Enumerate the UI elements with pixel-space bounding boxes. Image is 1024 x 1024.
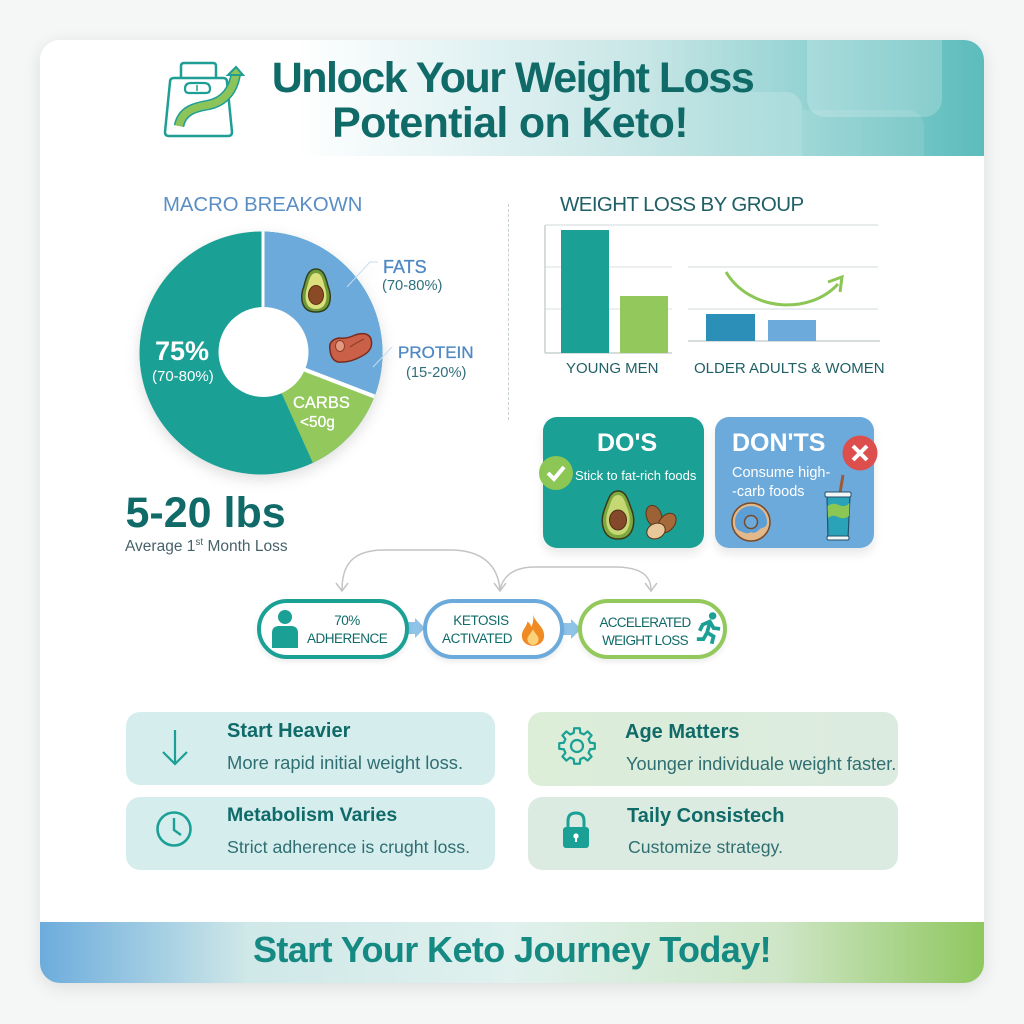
text: daily consistency: Customize strategy. <box>628 837 783 857</box>
bar chart <box>544 224 880 354</box>
step: ketosis <box>423 599 564 659</box>
panel: metabolism <box>126 797 495 870</box>
footer text: Start Your Keto Journey Today! <box>253 929 771 970</box>
text: metabolism: Strict adherence is crught loss. <box>227 837 470 857</box>
label: young men: YOUNG MEN <box>566 360 659 377</box>
icon: avocado and almonds <box>602 490 677 540</box>
icon: gear <box>558 727 596 765</box>
icon: lock <box>563 812 589 848</box>
text: age matters: Younger individuale weight faster. <box>626 754 896 774</box>
text: do's: Stick to fat-rich foods <box>575 468 696 483</box>
text: don'ts <box>732 465 830 500</box>
flow arrows <box>336 549 658 639</box>
label: protein: PROTEIN <box>398 343 474 362</box>
heading: don'ts: DON'TS <box>732 429 825 457</box>
label: protein <box>398 343 474 381</box>
icon: steak <box>330 334 372 362</box>
text: adherence <box>307 613 388 646</box>
footer band <box>40 922 984 983</box>
label: carbs: <50g <box>300 414 335 431</box>
text: ketosis: KETOSIS <box>453 613 509 628</box>
text: adherence: ADHERENCE <box>307 631 387 646</box>
text: start heavier: More rapid initial weight loss. <box>227 752 463 773</box>
label: 75 percent <box>152 336 214 385</box>
arrow: trend <box>726 272 842 305</box>
icon: cross <box>842 436 878 470</box>
icon: check <box>539 456 573 490</box>
text: weight loss: ACCELERATED <box>599 615 691 630</box>
pie chart <box>135 232 392 484</box>
label: 75 percent: 75% <box>155 336 209 366</box>
label: carbs <box>293 394 350 431</box>
title: Potential on Keto! <box>332 99 688 147</box>
icon: clock <box>156 811 192 847</box>
label: older adults: OLDER ADULTS & WOMEN <box>694 360 885 377</box>
title: Unlock Your Weight Loss <box>272 54 753 102</box>
panel: start heavier <box>126 712 495 785</box>
label: fats: FATS <box>383 257 427 277</box>
title <box>272 54 753 147</box>
text: don'ts: Consume high- <box>732 465 830 481</box>
step: weight loss <box>578 599 727 659</box>
text: adherence: 70% <box>334 613 360 628</box>
panel: do's <box>543 417 704 548</box>
stat: average loss: 5-20 lbs <box>126 489 286 537</box>
label: fats: (70-80%) <box>382 278 442 294</box>
icon: cup <box>824 474 852 540</box>
heading: age matters: Age Matters <box>625 721 739 743</box>
label: 75 percent: (70-80%) <box>152 368 214 385</box>
heading: do's: DO'S <box>597 429 657 457</box>
header band <box>40 40 984 156</box>
panel: age matters <box>528 712 898 786</box>
icon: person <box>272 610 298 648</box>
step: adherence <box>257 599 409 659</box>
icon: runner <box>696 612 720 644</box>
heading: start heavier: Start Heavier <box>227 720 350 742</box>
icon: avocado <box>302 269 330 312</box>
panel: daily consistency <box>528 797 898 870</box>
label: fats <box>382 257 442 294</box>
panel: don'ts <box>715 417 874 548</box>
heading: macro breakdown: MACRO BREAKOWN <box>163 194 362 216</box>
stat: average loss: Average 1st Month Loss <box>125 537 288 555</box>
label: protein: (15-20%) <box>406 365 466 381</box>
text: weight loss <box>599 615 691 648</box>
heading: weight loss by group: WEIGHT LOSS BY GROUP <box>560 193 804 216</box>
icon: donut <box>731 502 771 542</box>
text: don'ts: -carb foods <box>732 484 805 500</box>
text: ketosis: ACTIVATED <box>442 631 512 646</box>
text: weight loss: WEIGHT LOSS <box>602 633 688 648</box>
text: ketosis <box>442 613 512 646</box>
icon: scale with arrow <box>164 62 246 138</box>
heading: daily consistency: Taily Consistech <box>627 805 784 827</box>
heading: metabolism: Metabolism Varies <box>227 804 397 826</box>
icon: flame <box>522 614 544 646</box>
icon: down arrow <box>162 730 188 766</box>
label: carbs: CARBS <box>293 394 350 412</box>
